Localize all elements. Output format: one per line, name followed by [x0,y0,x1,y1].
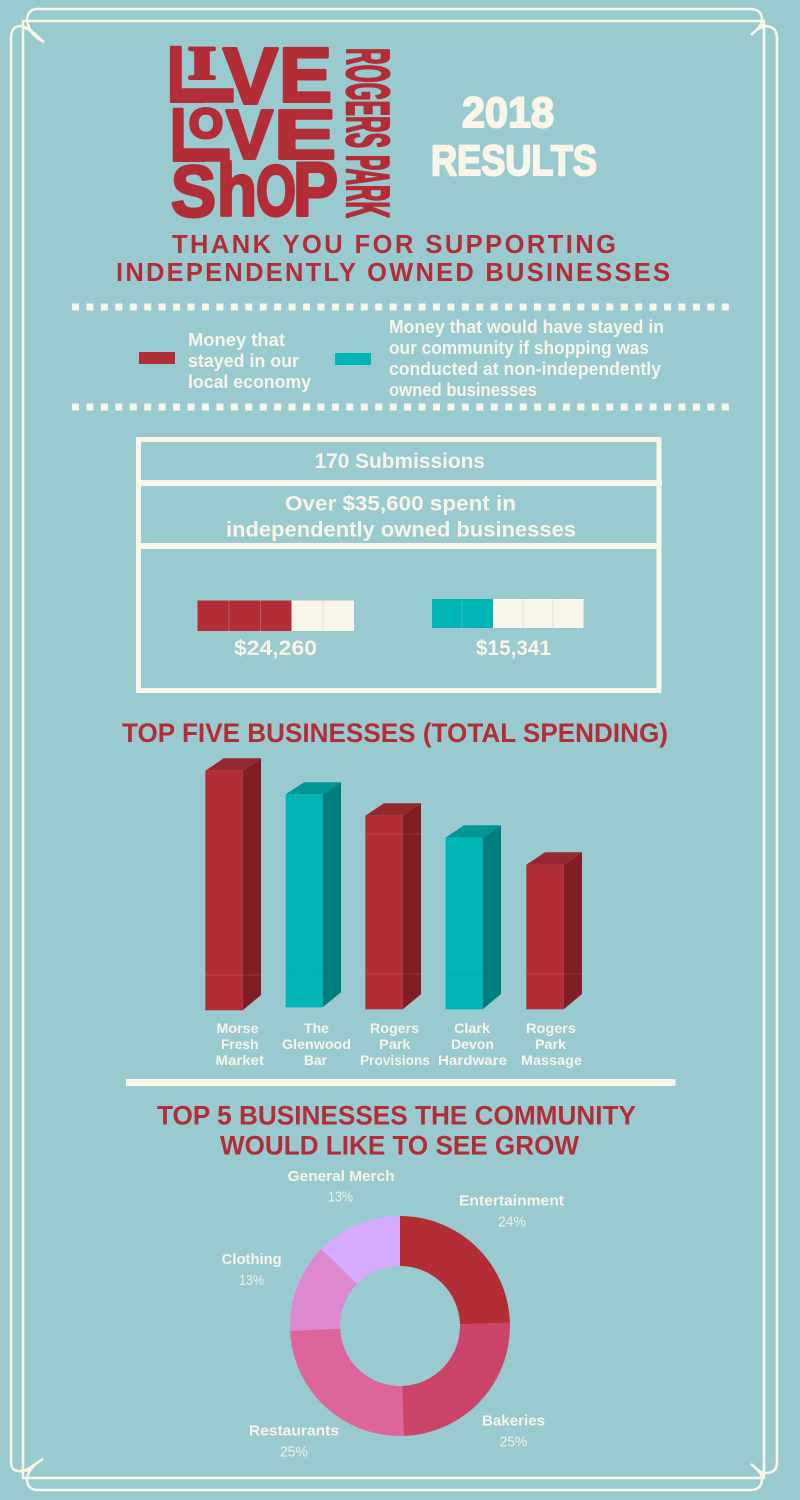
chart labels [216,1020,582,1068]
logo: Live Love Shop Rogers Park: h [217,148,257,232]
label: The Glenwood Bar: The [304,1020,329,1036]
legend: red swatch and label [139,330,311,392]
legend: teal swatch and label: our community if shopping was [389,338,649,358]
text: submissions: 170 Submissions [314,450,485,473]
heading: businesses the community would like to see grow [157,1100,636,1160]
panel: submissions and spending [138,440,662,690]
legend: teal swatch and label: conducted at non-independently [389,359,661,379]
logo: Live Love Shop Rogers Park: O [256,152,296,232]
label: Clark Devon Hardware: Devon [451,1036,494,1052]
logo: Live Love Shop Rogers Park: E [274,96,336,174]
label: Rogers Park Provisions: Provisions [360,1052,430,1068]
title: 2018 results: RESULTS [431,137,597,185]
slice: Entertainment [400,1216,510,1324]
label: Morse Fresh Market [216,1020,264,1068]
logo: Live Love Shop Rogers Park: V [226,96,273,174]
logo: Live Love Shop Rogers Park: P [293,148,338,232]
bar: $24,260: $24,260 [234,637,317,660]
label: Rogers Park Massage [521,1020,582,1068]
title: 2018 results: 2018 [462,89,554,137]
bar: Morse Fresh Market [205,758,261,1010]
logo: Live Love Shop Rogers Park: ROGERS [334,48,401,148]
label: Clark Devon Hardware: Hardware [438,1052,507,1068]
chart: donut [290,1216,510,1436]
label: Rogers Park Massage: Rogers [526,1020,576,1036]
logo: Live Love Shop Rogers Park: S [171,152,216,232]
bar: $15,341: $15,341 [476,637,551,660]
title: 2018 results [431,89,597,185]
donut label: Entertainment [459,1194,564,1231]
donut label: General Merch: 13% [328,1190,353,1206]
label: The Glenwood Bar: Glenwood [282,1036,351,1052]
slice: General Merch [321,1216,400,1284]
label: Morse Fresh Market: Fresh [221,1036,258,1052]
donut label: Bakeries: Bakeries [482,1414,545,1430]
donut label: Restaurants [249,1424,339,1460]
label: Morse Fresh Market: Market [216,1052,264,1068]
logo: Live Love Shop Rogers Park: O [189,100,223,146]
label: The Glenwood Bar: Bar [304,1052,328,1068]
donut label: Clothing [222,1252,282,1289]
donut label: General Merch: General Merch [288,1169,394,1185]
legend: red swatch and label: Money that [188,330,285,350]
donut label: Clothing: 13% [239,1273,264,1289]
text: PARK [334,155,401,218]
slice: Bakeries [402,1323,510,1436]
logo: Live Love Shop Rogers Park: L [170,94,206,176]
logo: Live Love Shop Rogers Park: E [279,32,332,118]
logo: Live Love Shop Rogers Park: V [223,32,278,120]
legend: red swatch and label: local economy [188,372,311,392]
label: Clark Devon Hardware [438,1020,507,1068]
donut label: Restaurants: 25% [280,1444,308,1460]
logo: Live Love Shop Rogers Park [167,30,401,232]
label: Rogers Park Massage: Massage [521,1052,582,1068]
donut label: Bakeries [482,1414,545,1450]
slice: Clothing [290,1249,357,1331]
bar: Clark Devon Hardware [446,825,501,1009]
bar: Rogers Park Massage [526,852,582,1009]
bar: $24,260 [198,600,354,660]
heading: thank you: THANK YOU FOR SUPPORTING [172,231,616,259]
donut label: Clothing: Clothing [222,1252,282,1268]
logo: Live Love Shop Rogers Park: L [167,30,207,118]
heading: businesses the community would like to see grow: TOP 5 BUSINESSES THE COMMUNITY [157,1100,636,1130]
heading: top five businesses: TOP FIVE BUSINESSES (TOTAL SPENDING) [122,718,668,748]
label: Morse Fresh Market: Morse [216,1020,259,1036]
legend: teal swatch and label: owned businesses [389,380,537,400]
heading: businesses the community would like to see grow: WOULD LIKE TO SEE GROW [220,1130,579,1160]
legend: red swatch and label: stayed in our [188,351,299,371]
donut label: Bakeries: 25% [500,1434,527,1450]
label: Rogers Park Provisions: Park [379,1036,411,1052]
label: Rogers Park Provisions: Rogers [370,1020,419,1036]
label: Rogers Park Provisions [360,1020,430,1068]
chart: top five businesses [205,758,582,1010]
text: total spent [226,492,576,542]
donut label: General Merch [288,1169,394,1206]
logo: Live Love Shop Rogers Park: I [188,38,216,90]
bar: $15,341 [432,599,584,660]
heading: thank you: INDEPENDENTLY OWNED BUSINESSES [116,259,670,287]
label: Rogers Park Massage: Park [535,1036,566,1052]
heading: thank you [116,231,670,287]
legend [139,317,664,400]
donut label: Entertainment: 24% [498,1215,526,1231]
label: The Glenwood Bar [282,1020,351,1068]
donut label: Restaurants: Restaurants [249,1424,339,1440]
legend: teal swatch and label [335,317,664,400]
donut label: Entertainment: Entertainment [459,1194,564,1210]
text: total spent: Over $35,600 spent in [285,492,516,516]
text: total spent: independently owned businesses [226,518,576,542]
legend: teal swatch and label: Money that would have stayed in [389,317,664,337]
label: Clark Devon Hardware: Clark [454,1020,490,1036]
slice: Restaurants [290,1329,404,1436]
bar: The Glenwood Bar [286,782,341,1007]
bar: Rogers Park Provisions [365,803,421,1009]
